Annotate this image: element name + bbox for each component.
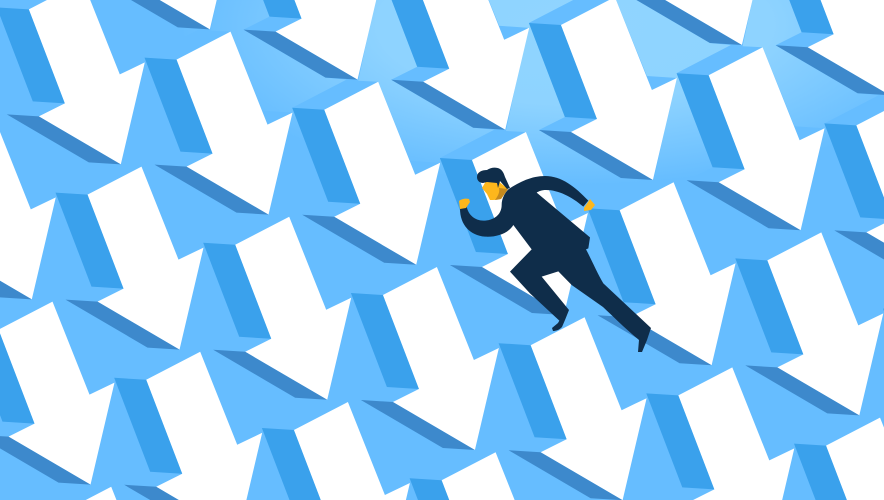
light gradient faces of the arrows: [220, 0, 877, 168]
front hand: [459, 199, 470, 209]
running businessman: [459, 168, 651, 352]
face: [482, 181, 508, 200]
back hand: [584, 199, 595, 211]
hair: [477, 168, 510, 189]
body and suit: [460, 176, 651, 352]
face shadow: [495, 188, 508, 200]
